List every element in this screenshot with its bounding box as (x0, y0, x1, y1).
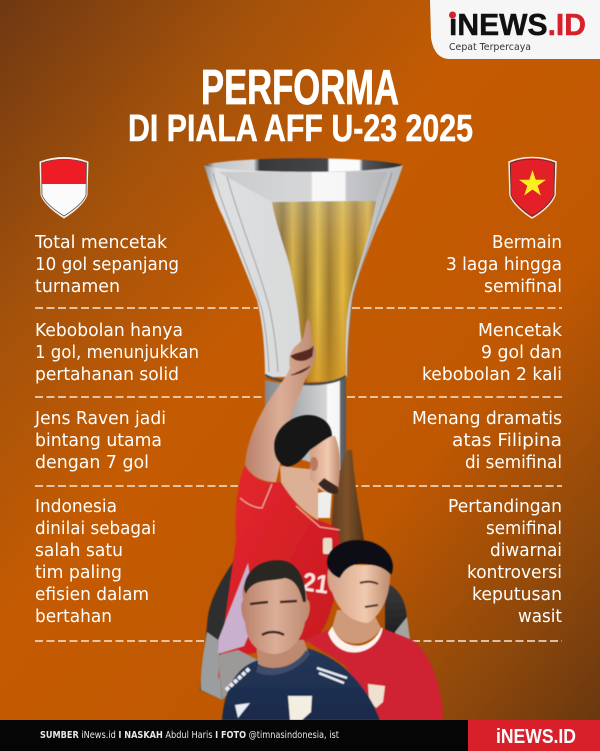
point 2: Mencetak (478, 321, 563, 341)
young player collar (329, 628, 382, 652)
coach shoulder stripes (317, 668, 347, 683)
coach collar (256, 650, 310, 675)
point 4: efisien dalam (35, 585, 149, 605)
young player badge (368, 684, 385, 708)
point 2: 1 gol, menunjukkan (35, 343, 199, 363)
point 2 (35, 321, 199, 385)
point 2: 9 gol dan (481, 343, 562, 363)
point 3: atas Filipina (452, 431, 562, 451)
striker sleeve trim (240, 484, 340, 530)
point 3: dengan 7 gol (35, 453, 149, 473)
point 4 (448, 497, 562, 627)
striker neck (280, 466, 318, 520)
striker hair (274, 415, 332, 467)
coach chest badge (288, 696, 312, 720)
striker head (310, 436, 340, 493)
footer logo (468, 720, 600, 751)
coach (222, 560, 380, 720)
player group photo (218, 319, 443, 720)
trophy rim (204, 158, 403, 172)
trophy column (265, 378, 346, 470)
young player neck (332, 610, 381, 644)
point 2: Kebobolan hanya (35, 321, 183, 341)
shirt number: 21 (301, 566, 331, 600)
young player features (360, 582, 378, 607)
footer credits: SUMBER iNews.id I NASKAH Abdul Haris I FOTO @timnasindonesia, ist (40, 730, 339, 741)
point 3: Menang dramatis (412, 409, 562, 429)
point 3: Jens Raven jadi (34, 409, 166, 429)
point 4: bertahan (35, 607, 112, 627)
point 1: 3 laga hingga (446, 255, 562, 275)
striker pointing upward (218, 319, 340, 680)
point 4: tim paling (35, 563, 122, 583)
point 3 (34, 409, 166, 473)
point 1: Total mencetak (34, 233, 168, 253)
trophy lower stem (330, 450, 364, 545)
coach face (241, 566, 310, 654)
young player hair (327, 540, 393, 578)
star (519, 170, 546, 196)
young player face (328, 565, 390, 623)
logo dot (449, 12, 456, 18)
point 4: kontroversi (467, 563, 562, 583)
title: DI PIALA AFF U-23 2025 (128, 108, 473, 150)
coach neck (256, 640, 308, 668)
point 2 (422, 321, 563, 385)
point 4: dinilai sebagai (35, 519, 156, 539)
trophy bowl (204, 165, 403, 377)
point 4: diwarnai (490, 541, 562, 561)
striker arm (245, 319, 316, 482)
brand mark (235, 703, 250, 718)
trophy ring (265, 375, 346, 384)
point 4: Indonesia (35, 497, 117, 517)
young player (305, 540, 443, 720)
logo wordmark: iNEWS.ID (449, 7, 586, 42)
trophy gold interior (272, 201, 376, 382)
footer logo: iNEWS.ID (496, 726, 576, 748)
point 1 (446, 233, 562, 297)
coach hair (244, 560, 306, 602)
point 1 (34, 233, 179, 297)
point 4: salah satu (35, 541, 123, 561)
trophy band (218, 172, 387, 201)
logo panel (430, 0, 600, 59)
vietnam column text (412, 233, 563, 627)
trophy bowl ridges (213, 172, 392, 375)
logo tagline: Cepat Terpercaya (449, 42, 531, 53)
point 1: 10 gol sepanjang (35, 255, 179, 275)
title: PERFORMA (201, 61, 399, 115)
point 2: kebobolan 2 kali (422, 365, 562, 385)
title (128, 61, 473, 150)
point 2: pertahanan solid (35, 365, 179, 385)
young player shirt (305, 628, 443, 720)
point 1: turnamen (35, 277, 120, 297)
dashed dividers (35, 308, 562, 641)
point 3: bintang utama (35, 431, 162, 451)
point 4: semifinal (486, 519, 562, 539)
lilac sleeve (218, 563, 255, 654)
coach shirt (222, 648, 380, 720)
point 3: di semifinal (465, 453, 562, 473)
striker ear (310, 457, 318, 471)
grey undershirt (218, 650, 258, 700)
trophy (200, 158, 411, 700)
indonesia shield (40, 158, 88, 218)
vietnam shield (509, 158, 556, 218)
striker badge (323, 538, 332, 554)
striker jersey (218, 465, 340, 680)
point 4: Pertandingan (448, 497, 562, 517)
trophy stem highlight (317, 490, 332, 518)
point 3 (412, 409, 562, 473)
point 1: Bermain (492, 233, 562, 253)
point 1: semifinal (484, 277, 562, 297)
striker hand shadow (291, 347, 313, 375)
coach sleeve logo (226, 668, 250, 690)
trophy foot (200, 555, 411, 700)
striker beard (318, 478, 338, 494)
point 4: keputusan (472, 585, 562, 605)
indonesia column text (34, 233, 199, 627)
point 4: wasit (518, 607, 562, 627)
footer bar (0, 720, 600, 751)
coach features (250, 601, 297, 635)
point 4 (35, 497, 156, 627)
